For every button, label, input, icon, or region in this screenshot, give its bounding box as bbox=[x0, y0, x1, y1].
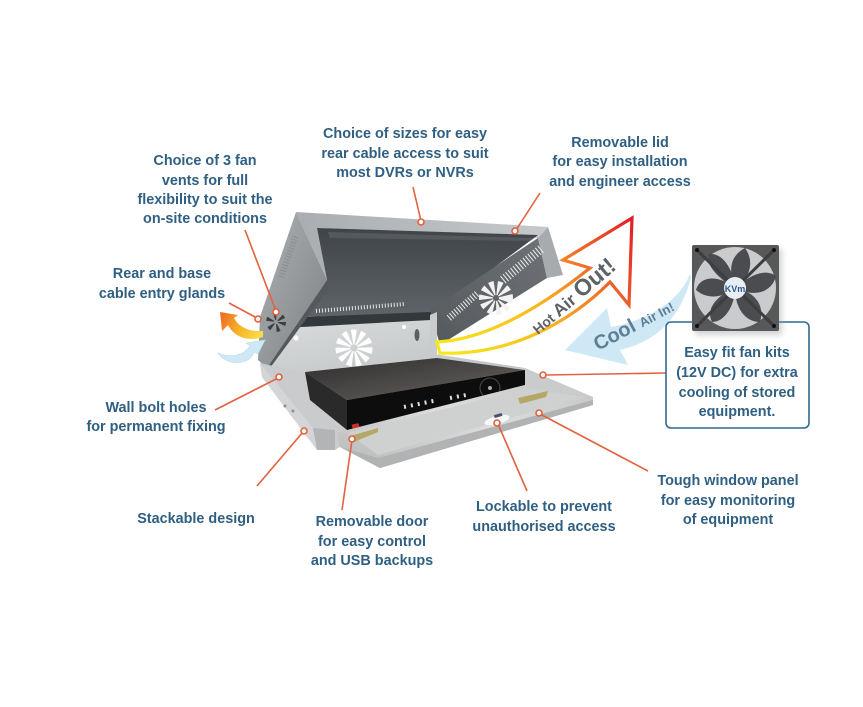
callout: fan kits: equipment. bbox=[699, 404, 775, 420]
label: removable door: Removable door bbox=[316, 514, 429, 530]
label: cable entry: Rear and base bbox=[113, 266, 211, 282]
label: lockable: unauthorised access bbox=[472, 519, 616, 535]
label: removable door bbox=[311, 514, 433, 569]
label: removable lid bbox=[549, 135, 691, 190]
label: fan vents bbox=[137, 153, 273, 227]
enclosure illustration bbox=[258, 212, 593, 468]
label: fan vents: on-site conditions bbox=[143, 211, 267, 227]
label: fan vents: flexibility to suit the bbox=[137, 192, 273, 208]
arrow: rear hot air out bbox=[220, 312, 263, 339]
label: wall bolt holes: for permanent fixing bbox=[86, 419, 226, 435]
label: window panel: Tough window panel bbox=[657, 473, 799, 489]
label: removable lid: for easy installation bbox=[552, 154, 688, 170]
icon: cooling fan bbox=[692, 245, 782, 335]
label: fan vents: Choice of 3 fan bbox=[153, 153, 257, 169]
label: sizes: rear cable access to suit bbox=[321, 146, 489, 162]
label: window panel bbox=[657, 473, 799, 528]
label: wall bolt holes bbox=[86, 400, 226, 435]
arrow: rear cool air in bbox=[218, 340, 265, 363]
label: sizes: most DVRs or NVRs bbox=[336, 165, 474, 181]
leader lines bbox=[215, 187, 666, 510]
back wall bbox=[262, 312, 525, 372]
label: window panel: of equipment bbox=[683, 512, 773, 528]
front door bbox=[337, 385, 593, 468]
label: Cool Air In: Cool Air In! bbox=[590, 295, 678, 355]
label: sizes bbox=[321, 126, 489, 181]
label: stackable: Stackable design bbox=[137, 511, 255, 527]
fan brand label: KVm bbox=[725, 284, 745, 294]
label: lockable bbox=[472, 499, 616, 535]
label: removable door: and USB backups bbox=[311, 553, 433, 569]
arrow: cool air in bbox=[565, 274, 691, 365]
label: removable lid: Removable lid bbox=[571, 135, 669, 151]
label: sizes: Choice of sizes for easy bbox=[323, 126, 487, 142]
label: fan vents: vents for full bbox=[162, 173, 248, 189]
label: lockable: Lockable to prevent bbox=[476, 499, 612, 515]
arrow: hot air out bbox=[437, 218, 632, 353]
label: cable entry bbox=[99, 266, 225, 302]
label: window panel: for easy monitoring bbox=[661, 493, 795, 509]
lid bbox=[296, 212, 563, 345]
label: removable lid: and engineer access bbox=[549, 174, 691, 190]
callout: fan kits: (12V DC) for extra bbox=[676, 365, 799, 381]
label: wall bolt holes: Wall bolt holes bbox=[105, 400, 207, 416]
DVR recorder bbox=[305, 358, 525, 430]
callout: fan kits bbox=[666, 322, 809, 428]
left lid panel bbox=[258, 212, 332, 368]
label: cable entry: cable entry glands bbox=[99, 286, 225, 302]
base tray bbox=[260, 363, 593, 468]
callout: fan kits: Easy fit fan kits bbox=[684, 345, 790, 361]
label: Hot Air Out: Hot Air Out! bbox=[525, 252, 621, 339]
callout: fan kits: cooling of stored bbox=[679, 385, 795, 401]
label: removable door: for easy control bbox=[318, 534, 426, 550]
